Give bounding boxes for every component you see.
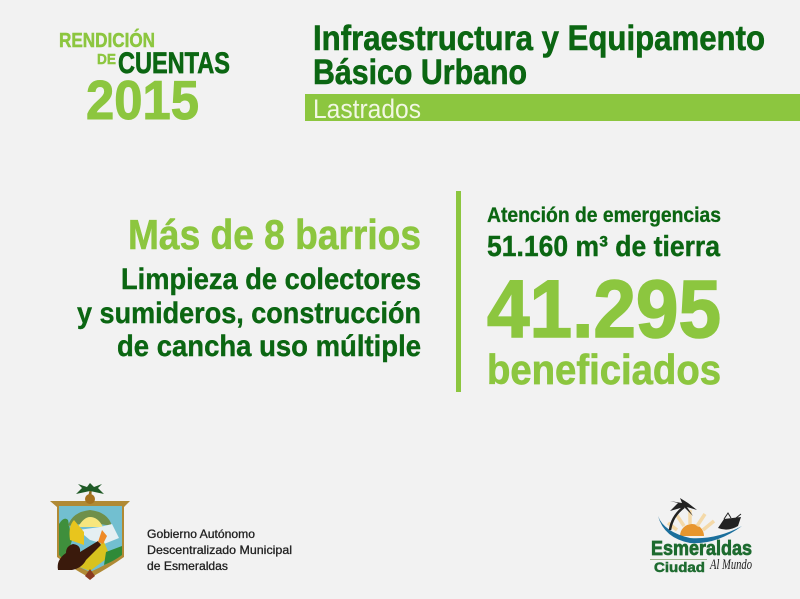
- text block: institution name: [147, 527, 292, 573]
- text block: emergencies and beneficiaries: 41.295: [487, 264, 721, 355]
- text block: barrios and works: de cancha uso múltiple: [117, 330, 421, 363]
- text block: institution name: Descentralizado Municipal: [147, 543, 292, 557]
- logo: Rendición de Cuentas 2015: RENDICIÓN: [59, 28, 155, 52]
- text block: barrios and works: Limpieza de colectores: [121, 263, 421, 296]
- text block: institution name: Gobierno Autónomo: [147, 527, 255, 541]
- text block: emergencies and beneficiaries: 51.160 m³ de tierra: [487, 231, 721, 263]
- icon: municipal coat of arms: [50, 483, 130, 580]
- subtitle bar: Lastrados: Lastrados: [313, 94, 421, 124]
- text block: emergencies and beneficiaries: beneficiados: [487, 346, 721, 393]
- logo: Rendición de Cuentas 2015: 2015: [86, 69, 199, 131]
- logo: Rendición de Cuentas 2015: DE: [97, 51, 116, 68]
- text block: institution name: de Esmeraldas: [147, 559, 228, 573]
- title: Básico Urbano: [313, 53, 527, 92]
- text block: barrios and works: Más de 8 barrios: [128, 211, 421, 258]
- logo: Rendición de Cuentas 2015: [59, 28, 230, 131]
- icon: Esmeraldas Ciudad logo: Esmeraldas: [651, 538, 752, 560]
- vertical divider: [456, 191, 461, 392]
- subtitle bar: Lastrados: [305, 94, 800, 124]
- icon: Esmeraldas Ciudad logo: [650, 498, 752, 575]
- logo: Rendición de Cuentas 2015: CUENTAS: [118, 47, 230, 80]
- text block: emergencies and beneficiaries: [487, 204, 721, 393]
- title: [313, 19, 765, 92]
- icon: Esmeraldas Ciudad logo: Ciudad: [654, 559, 705, 575]
- text block: barrios and works: [77, 211, 421, 363]
- icon: Esmeraldas Ciudad logo: Al Mundo: [709, 557, 752, 573]
- text block: barrios and works: y sumideros, construcción: [77, 297, 421, 330]
- text block: emergencies and beneficiaries: Atención de emergencias: [487, 204, 721, 227]
